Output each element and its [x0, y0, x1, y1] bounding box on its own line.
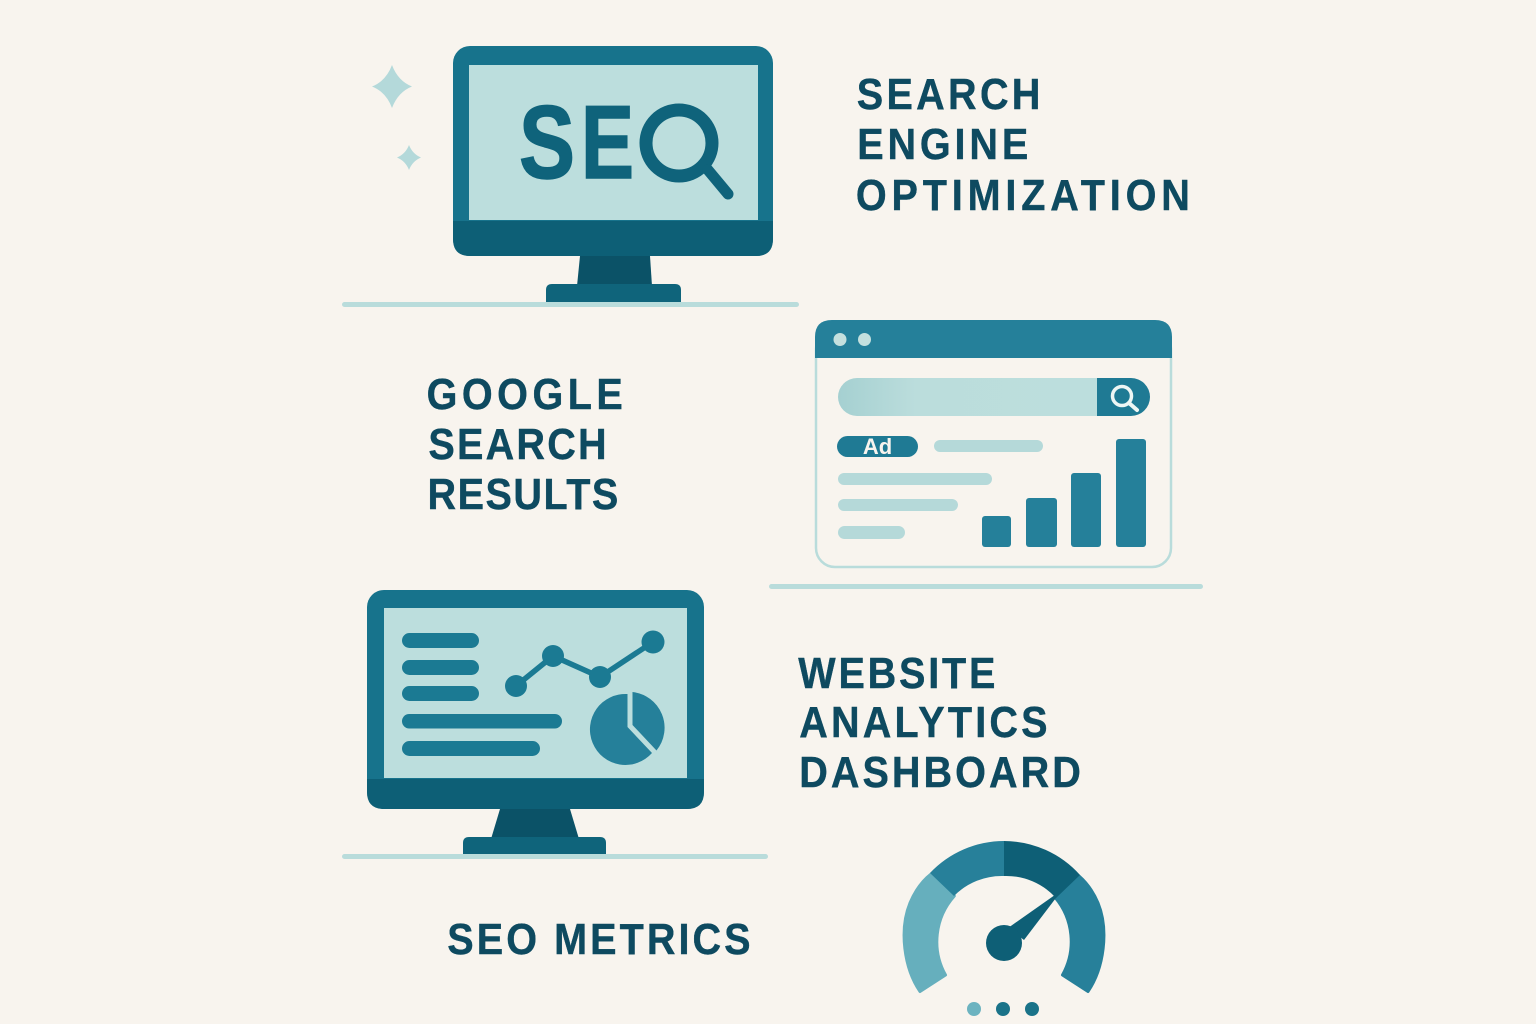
- search bar: [838, 378, 1150, 416]
- heading: Search Engine Optimization: ENGINE: [857, 119, 1028, 168]
- heading: Search Engine Optimization: [856, 69, 1190, 219]
- heading: Website Analytics Dashboard: [798, 648, 1081, 796]
- ad badge: Ad: [863, 434, 892, 459]
- icon: analytics monitor: [367, 590, 704, 855]
- icon: speedometer gauge: [904, 841, 1104, 1016]
- ad badge: [837, 434, 918, 459]
- heading: Google Search Results: GOOGLE: [427, 369, 623, 418]
- heading: Website Analytics Dashboard: ANALYTICS: [799, 697, 1048, 746]
- heading: Website Analytics Dashboard: WEBSITE: [798, 648, 995, 697]
- bar chart: [982, 439, 1146, 547]
- magnifier forming Q: [646, 110, 728, 194]
- pie chart: [590, 692, 665, 765]
- window dots: [834, 333, 871, 346]
- result text lines: [838, 440, 1043, 539]
- gauge needle: [986, 890, 1062, 961]
- icon: sparkles: [372, 65, 421, 170]
- shelf line under analytics monitor: [342, 854, 768, 859]
- heading: Search Engine Optimization: OPTIMIZATION: [856, 170, 1190, 219]
- heading: SEO Metrics: SEO METRICS: [447, 914, 751, 963]
- shelf line under SEO monitor: [342, 302, 799, 307]
- icon: browser search results window: [815, 320, 1172, 567]
- dashboard text rows: [402, 633, 562, 756]
- SEO word on screen: S: [519, 85, 575, 201]
- SEO word on screen: E: [581, 85, 634, 201]
- gauge indicator dots: [967, 1002, 1039, 1016]
- heading: Google Search Results: [427, 369, 623, 518]
- heading: Google Search Results: RESULTS: [428, 469, 618, 518]
- icon: SEO monitor: [453, 46, 773, 303]
- shelf line under browser: [769, 584, 1203, 589]
- SEO word on screen: [519, 85, 634, 201]
- heading: Google Search Results: SEARCH: [428, 419, 607, 468]
- line chart: [505, 630, 664, 697]
- heading: Website Analytics Dashboard: DASHBOARD: [799, 747, 1081, 796]
- heading: Search Engine Optimization: SEARCH: [857, 69, 1040, 118]
